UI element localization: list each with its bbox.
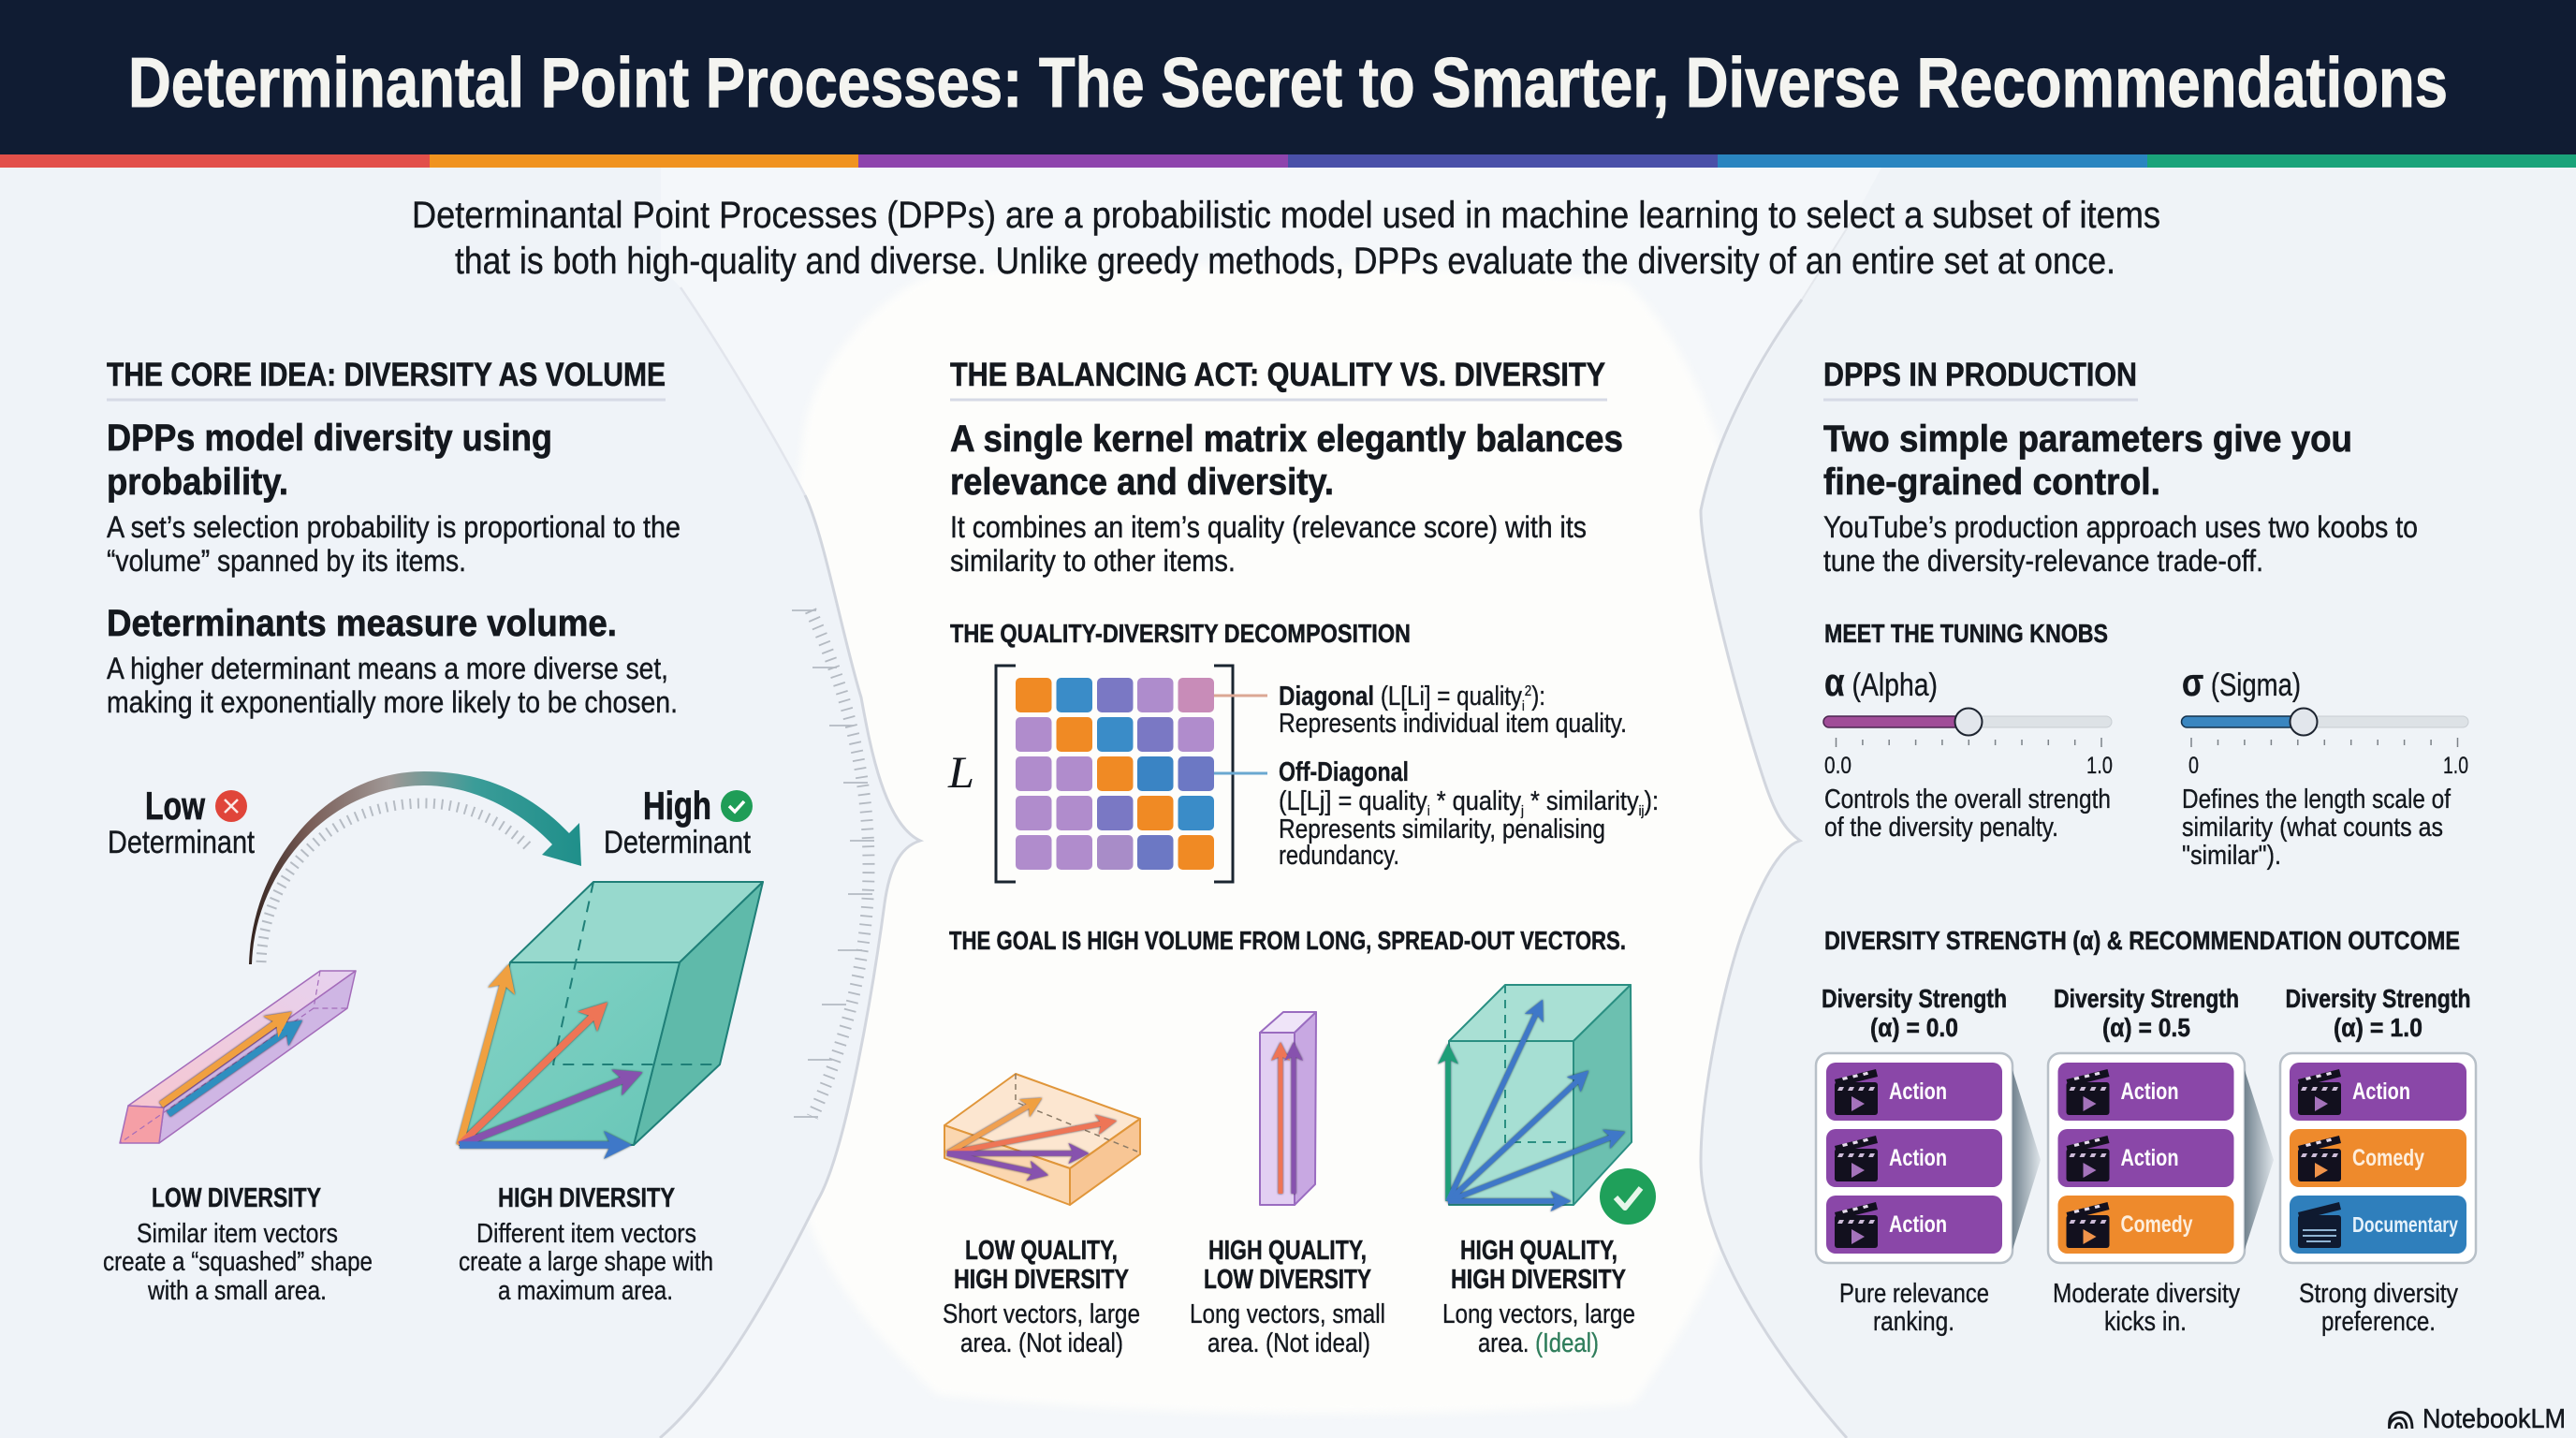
caption: low diversity: Similar item vectors [137, 1219, 338, 1249]
column: alpha 0.0 [1816, 984, 2012, 1337]
subheading: determinants measure volume: Determinants measure volume. [107, 603, 617, 644]
chip: action: Action [2121, 1078, 2179, 1105]
arrow: blue vector 1 [1448, 1013, 1537, 1201]
arrow: coral vector [1279, 1055, 1282, 1194]
label: low determinant [108, 784, 255, 860]
label: high determinant [604, 784, 753, 860]
heading: production: DPPS IN PRODUCTION [1823, 357, 2137, 393]
chip: action: Action [1889, 1211, 1947, 1238]
arrow: chevron 2 [2245, 1070, 2274, 1250]
column: alpha 0.5: (α) = 0.5 [2102, 1013, 2190, 1042]
shape: high quality high diversity prism [1448, 985, 1656, 1225]
column: alpha 1.0: preference. [2321, 1307, 2436, 1337]
column: alpha 0.0: Pure relevance [1839, 1279, 1989, 1309]
callout: off-diagonal: Represents similarity, penalising [1279, 814, 1605, 844]
caption: low diversity: create a “squashed” shape [103, 1247, 373, 1277]
label: high determinant: High [643, 784, 711, 828]
callout: diagonal [1214, 682, 1627, 739]
intro text: that is both high-quality and diverse. Unlike greedy methods, DPPs evaluate the diversity of an entire set at once. [455, 241, 2115, 282]
heading: decomposition: THE QUALITY-DIVERSITY DECOMPOSITION [950, 619, 1411, 648]
column: alpha 0.0: (α) = 0.0 [1870, 1013, 1958, 1042]
callout: diagonal: Represents individual item quality. [1279, 709, 1627, 739]
subheading: kernel matrix: relevance and diversity. [950, 462, 1334, 503]
caption: low quality high diversity: area. (Not ideal) [960, 1328, 1123, 1358]
heading: goal: THE GOAL IS HIGH VOLUME FROM LONG, SPREAD-OUT VECTORS. [949, 926, 1626, 955]
column: alpha 0.5: Moderate diversity [2053, 1279, 2240, 1309]
slider: alpha: 1.0 [2086, 753, 2113, 779]
subheading: DPPs model diversity: probability. [107, 462, 288, 503]
text: YouTube approach: tune the diversity-relevance trade-off. [1823, 544, 2263, 578]
caption: low diversity: LOW DIVERSITY [152, 1183, 321, 1213]
column: alpha 0.5: Diversity Strength [2054, 984, 2239, 1013]
caption: high quality high diversity [1442, 1236, 1635, 1358]
callout: off-diagonal [1214, 757, 1659, 871]
arrow: blue vector [460, 1141, 612, 1149]
rainbow stripe [0, 154, 2576, 168]
chip: action: Action [1889, 1078, 1947, 1105]
column: alpha 0.5: kicks in. [2104, 1307, 2187, 1337]
matrix label L: L [947, 748, 974, 798]
subheading: kernel matrix: A single kernel matrix elegantly balances [950, 418, 1623, 460]
panel: balancing act [943, 357, 1659, 1358]
icon: NotebookLM arcs [2389, 1412, 2412, 1429]
slider: alpha [1823, 660, 2113, 843]
chip: action [2057, 1129, 2233, 1187]
callout: diagonal: Diagonal (L[Li] = quality [1279, 682, 1552, 712]
chip: action [1826, 1129, 2002, 1187]
text: combines quality and similarity: similarity to other items. [950, 544, 1236, 578]
subheading: kernel matrix [950, 418, 1623, 503]
panel background: left [0, 168, 920, 1438]
heading: core idea: THE CORE IDEA: DIVERSITY AS VOLUME [107, 357, 666, 393]
panel background: centre white [749, 265, 1811, 1414]
shape: high quality low diversity tall prism [1260, 1012, 1316, 1205]
arrow: blue vector 3 [1448, 1137, 1612, 1201]
chip: action [2290, 1063, 2466, 1121]
column: alpha 1.0 [2280, 984, 2476, 1337]
caption: high quality low diversity: area. (Not ideal) [1208, 1328, 1370, 1358]
slider: sigma: similarity (what counts as [2182, 813, 2443, 843]
chip: action [1826, 1196, 2002, 1254]
subheading: two parameters: Two simple parameters give you [1823, 418, 2352, 460]
callout: off-diagonal: * similarity [1524, 786, 1639, 816]
panel: DPPs in production [1816, 357, 2476, 1337]
caption: high diversity: create a large shape with [459, 1247, 713, 1277]
slider: sigma: 1.0 [2443, 753, 2468, 779]
shape: high diversity large prism [460, 882, 763, 1145]
caption: low quality high diversity [943, 1236, 1140, 1358]
chip: comedy [2057, 1196, 2233, 1254]
arrow: purple vector [460, 1079, 624, 1145]
label: low determinant: Low [145, 784, 205, 828]
chip: action [1826, 1063, 2002, 1121]
callout: off-diagonal: j [1520, 803, 1524, 819]
caption: low diversity: with a small area. [147, 1276, 327, 1306]
text: combines quality and similarity [950, 510, 1587, 578]
arrow: red vector [460, 1016, 593, 1145]
chip: action: Action [2121, 1145, 2179, 1171]
arrow: second purple vector [947, 1153, 1034, 1172]
column: alpha 0.0: ranking. [1873, 1307, 1954, 1337]
callout: off-diagonal: redundancy. [1279, 841, 1399, 871]
arrow: blue vector 2 [1448, 1080, 1578, 1201]
caption: low diversity [103, 1183, 373, 1306]
slider: sigma [2181, 660, 2468, 871]
caption: high diversity: HIGH DIVERSITY [498, 1183, 675, 1213]
callout: off-diagonal: * quality [1430, 786, 1521, 816]
label: low determinant: Determinant [108, 825, 255, 860]
callout: off-diagonal: ij [1639, 803, 1644, 819]
shape: low diversity squashed prism [120, 971, 356, 1143]
caption: high quality high diversity: HIGH DIVERSITY [1451, 1265, 1626, 1295]
subheading: DPPs model diversity: DPPs model diversity using [107, 418, 552, 459]
callout: diagonal: i [1522, 698, 1525, 714]
caption: high quality high diversity: Long vectors, large [1442, 1299, 1635, 1329]
subheading: DPPs model diversity [107, 418, 552, 503]
text: selection probability [107, 510, 681, 578]
arrow: purple vector [947, 1151, 1075, 1156]
subheading: two parameters: fine-grained control. [1823, 462, 2160, 503]
callout: off-diagonal: (L[Lj] = quality [1279, 786, 1448, 816]
heading: balancing act: THE BALANCING ACT: QUALITY VS. DIVERSITY [950, 357, 1605, 393]
intro text [412, 195, 2160, 282]
callout: off-diagonal: ): [1644, 786, 1659, 816]
arrow: blue vector 4 [1448, 1198, 1557, 1204]
caption: high quality high diversity: area. (Ideal) [1478, 1328, 1599, 1358]
slider: alpha: α (Alpha) [1824, 660, 1938, 704]
callout: diagonal: 2 [1525, 683, 1531, 699]
chip: comedy: Comedy [2352, 1145, 2424, 1171]
text: YouTube approach [1823, 510, 2418, 578]
header band [0, 0, 2576, 154]
text: higher determinant: making it exponentially more likely to be chosen. [107, 685, 678, 719]
slider: alpha: of the diversity penalty. [1824, 813, 2058, 843]
panel: core idea [103, 357, 763, 1306]
column: alpha 1.0: Strong diversity [2299, 1279, 2458, 1309]
caption: low quality high diversity: HIGH DIVERSITY [954, 1265, 1129, 1295]
brand: NotebookLM: NotebookLM [2422, 1404, 2566, 1434]
callout: off-diagonal: i [1427, 803, 1430, 819]
slider: sigma: "similar"). [2182, 841, 2281, 871]
shape: low quality high diversity box [944, 1074, 1140, 1205]
column: alpha 0.0: Diversity Strength [1822, 984, 2007, 1013]
arrow: orange vector [460, 983, 504, 1145]
caption: high quality low diversity [1190, 1236, 1385, 1358]
slider: alpha: Controls the overall strength [1824, 785, 2111, 814]
caption: low quality high diversity: Short vectors, large [943, 1299, 1140, 1329]
arrow: orange vector [161, 1022, 277, 1105]
column: alpha 1.0: Diversity Strength [2286, 984, 2471, 1013]
arrow: purple vector [1292, 1055, 1295, 1194]
text: higher determinant: A higher determinant means a more diverse set, [107, 652, 668, 685]
caption: high quality low diversity: Long vectors, small [1190, 1299, 1385, 1329]
intro text: Determinantal Point Processes (DPPs) are a probabilistic model used in machine learning to select a subset of items [412, 195, 2160, 236]
text: selection probability: “volume” spanned by its items. [107, 544, 466, 578]
caption: high quality low diversity: LOW DIVERSITY [1204, 1265, 1371, 1295]
subheading: two parameters [1823, 418, 2352, 503]
arrow: green vector [1445, 1058, 1451, 1201]
arrow: blue vector [168, 1031, 287, 1114]
caption: high quality high diversity: HIGH QUALITY, [1460, 1236, 1617, 1266]
icon: green check [1600, 1168, 1656, 1225]
slider: sigma: 0 [2188, 753, 2199, 779]
arrow: low to high determinant with gauge [249, 771, 581, 964]
caption: high diversity: Different item vectors [476, 1219, 696, 1249]
chip: comedy: Comedy [2121, 1211, 2193, 1238]
chip: action [2057, 1063, 2233, 1121]
caption: low quality high diversity: LOW QUALITY, [965, 1236, 1118, 1266]
heading: tuning knobs: MEET THE TUNING KNOBS [1824, 619, 2108, 648]
chip: action: Action [1889, 1145, 1947, 1171]
chip: action: Action [2352, 1078, 2410, 1105]
callout: off-diagonal: Off-Diagonal [1279, 757, 1409, 787]
chip: comedy [2290, 1129, 2466, 1187]
arrow: coral vector [947, 1123, 1103, 1153]
arrow: chevron 1 [2012, 1070, 2041, 1250]
slider: sigma: Defines the length scale of [2182, 785, 2452, 814]
caption: high diversity: a maximum area. [498, 1276, 673, 1306]
slider: sigma: σ (Sigma) [2182, 660, 2301, 704]
text: selection probability: A set’s selection probability is proportional to the [107, 510, 681, 544]
column: alpha 1.0: (α) = 1.0 [2334, 1013, 2422, 1042]
caption: high quality low diversity: HIGH QUALITY, [1208, 1236, 1367, 1266]
slider: alpha: 0.0 [1824, 753, 1852, 779]
text: YouTube approach: YouTube’s production approach uses two koobs to [1823, 510, 2418, 544]
text: combines quality and similarity: It combines an item’s quality (relevance score) with its [950, 510, 1587, 544]
heading: diversity strength: DIVERSITY STRENGTH (α) & RECOMMENDATION OUTCOME [1824, 926, 2460, 955]
label: high determinant: Determinant [604, 825, 751, 860]
matrix: kernel heatmap [996, 666, 1233, 882]
callout: diagonal: ): [1531, 682, 1545, 712]
panel background: right [1701, 168, 2576, 1438]
arrow: orange vector [947, 1105, 1030, 1153]
column: alpha 0.5 [2048, 984, 2245, 1337]
caption: high diversity [459, 1183, 713, 1306]
chip: documentary: Documentary [2352, 1212, 2458, 1237]
chip: documentary [2290, 1196, 2466, 1254]
text: higher determinant [107, 652, 678, 719]
